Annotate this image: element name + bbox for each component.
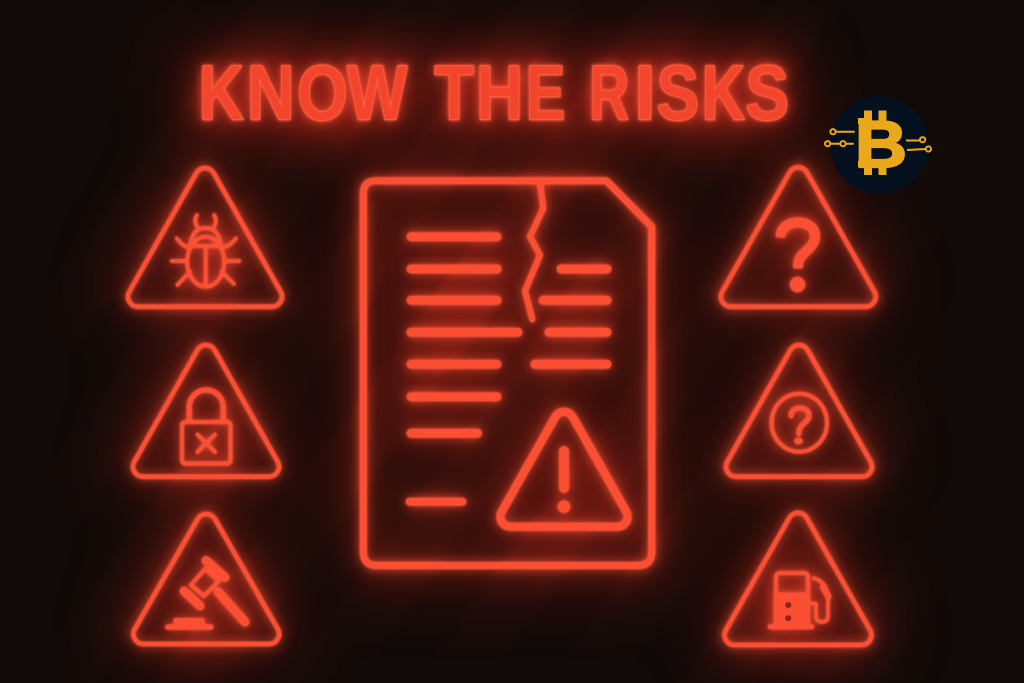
title xyxy=(199,48,789,136)
title: S xyxy=(745,48,789,136)
title: T xyxy=(434,48,474,136)
title: S xyxy=(656,48,699,136)
icon: fuel pump xyxy=(770,573,828,627)
bitcoin badge xyxy=(825,96,931,194)
warning triangle: circled question mark xyxy=(726,345,872,477)
icon: large question mark xyxy=(780,222,815,292)
bitcoin symbol: B xyxy=(855,107,907,181)
warning triangle: question mark xyxy=(721,167,876,307)
icon: bug xyxy=(172,215,239,287)
title: O xyxy=(297,48,348,136)
title: K xyxy=(702,48,745,136)
circuit traces xyxy=(825,129,931,152)
warning triangle: gas pump xyxy=(725,513,871,645)
crack xyxy=(525,183,543,320)
central contract document xyxy=(363,181,652,566)
title: R xyxy=(589,48,629,136)
warning triangle: locked funds xyxy=(133,345,279,477)
document outline xyxy=(363,181,652,566)
title: E xyxy=(526,48,565,136)
icon: padlock with x xyxy=(182,390,230,464)
icon: circled question mark xyxy=(772,394,827,452)
title: N xyxy=(247,48,295,136)
title: K xyxy=(199,48,244,136)
warning triangle: legal gavel xyxy=(133,514,279,644)
warning triangle: software bug xyxy=(128,168,282,307)
title: W xyxy=(347,48,408,136)
warning triangle with exclamation mark xyxy=(500,412,628,527)
text lines, right column xyxy=(535,269,607,364)
title: H xyxy=(476,48,523,136)
title: I xyxy=(634,48,656,136)
icon: gavel xyxy=(168,560,245,627)
text lines, left column xyxy=(410,237,518,502)
